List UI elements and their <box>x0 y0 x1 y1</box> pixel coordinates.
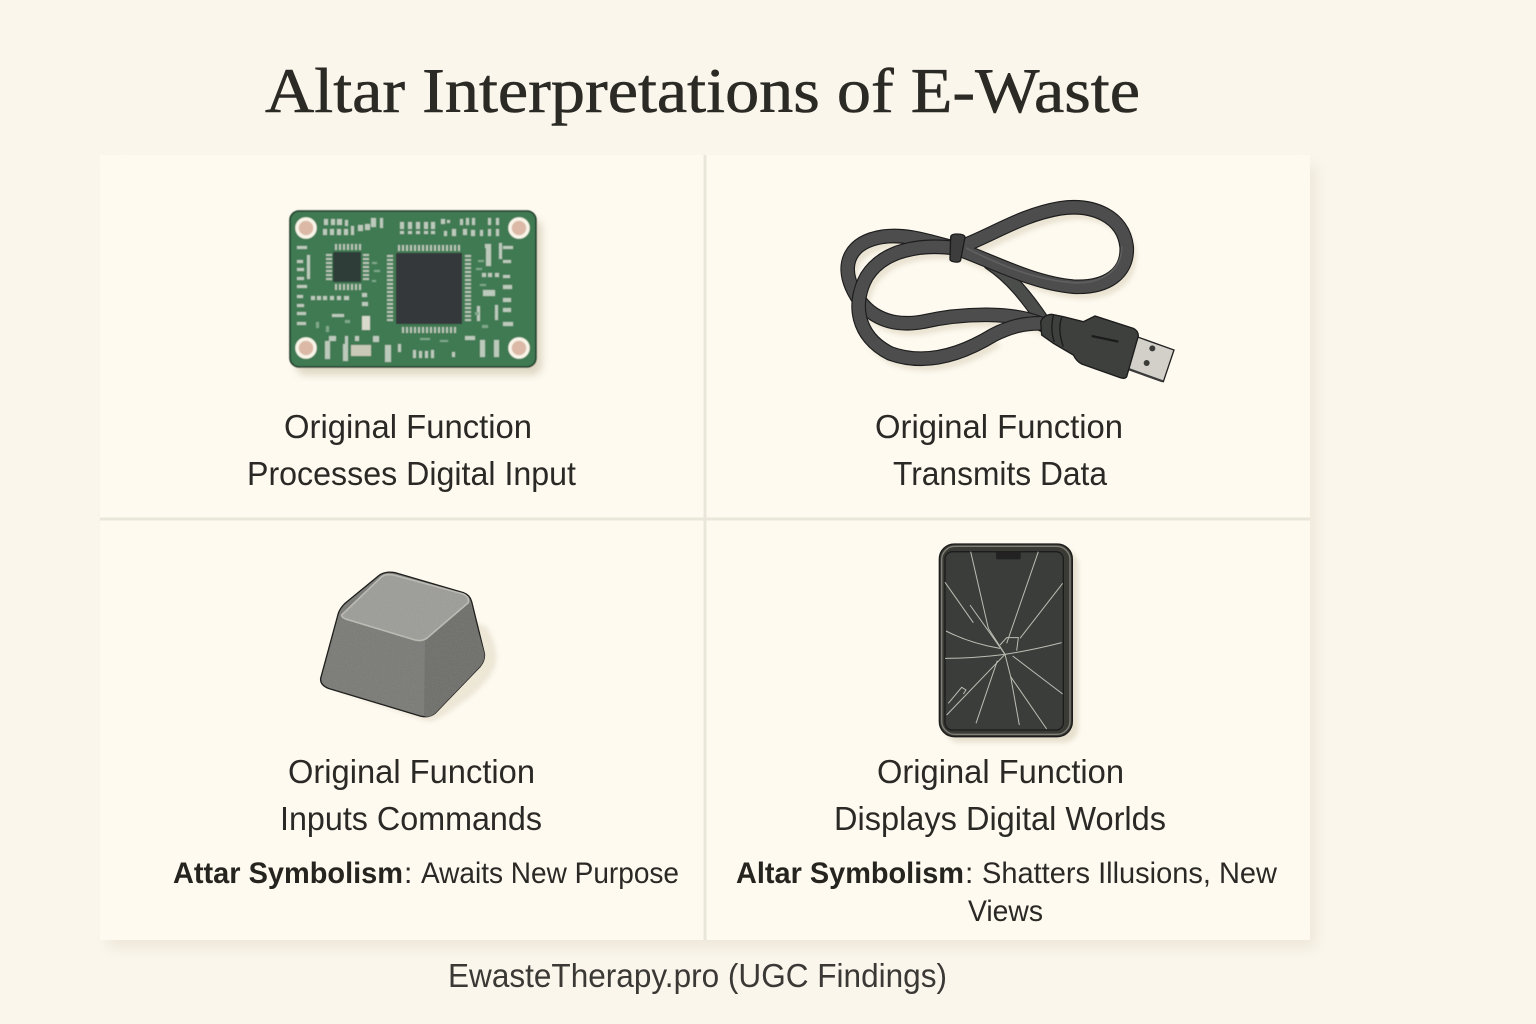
usb plug housing <box>1041 314 1138 378</box>
panel grid <box>100 155 1316 948</box>
text: attar symbolism: : <box>404 857 412 890</box>
icon: cracked screen <box>939 544 1078 743</box>
panel: keycap <box>173 572 679 890</box>
text: altar symbolism: Shatters Illusions, New <box>982 857 1277 890</box>
text: original function, cracked screen <box>834 753 1166 837</box>
panel: circuit board <box>247 211 576 492</box>
chip pins <box>329 247 468 330</box>
mounting holes <box>297 219 528 357</box>
panel: usb cable <box>848 207 1174 492</box>
panel: cracked screen <box>736 544 1277 928</box>
icon: circuit board <box>290 211 542 375</box>
usb metal tip <box>1127 337 1174 382</box>
text: original function, usb cable <box>875 408 1123 492</box>
text: original function, usb cable: Transmits Data <box>893 455 1108 492</box>
text: original function, circuit board: Processes Digital Input <box>247 455 576 492</box>
text: altar symbolism: : <box>965 857 973 890</box>
components <box>297 218 513 362</box>
icon: keycap <box>321 572 496 722</box>
text: attar symbolism: Attar Symbolism <box>173 857 403 890</box>
title: Altar Interpretations of E-Waste <box>265 55 1140 126</box>
text: attar symbolism: Awaits New Purpose <box>421 857 679 890</box>
icon: usb cable <box>848 207 1174 382</box>
text: altar symbolism: Views <box>968 895 1043 928</box>
text: original function, circuit board <box>247 408 576 492</box>
board traces <box>316 260 488 342</box>
text: original function, circuit board: Original Function <box>284 408 532 445</box>
text: original function, keycap: Inputs Commands <box>280 800 542 837</box>
text: original function, cracked screen: Original Function <box>877 753 1124 790</box>
text: original function, cracked screen: Displays Digital Worlds <box>834 800 1166 837</box>
text: original function, keycap: Original Function <box>288 753 535 790</box>
text: original function, usb cable: Original Function <box>875 408 1123 445</box>
text: original function, keycap <box>280 753 542 837</box>
cable tie <box>950 234 965 262</box>
text: altar symbolism <box>736 857 1277 928</box>
text: attar symbolism <box>173 857 679 890</box>
footer source: EwasteTherapy.pro (UGC Findings) <box>448 957 947 994</box>
text: altar symbolism: Altar Symbolism <box>736 857 964 890</box>
chips <box>396 253 462 324</box>
